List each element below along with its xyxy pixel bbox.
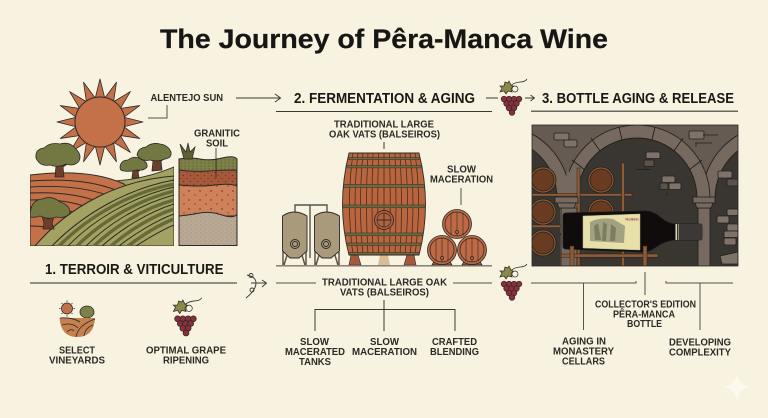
icon: sparkle watermark: [724, 374, 750, 400]
arrow: sun to fermentation: [236, 94, 280, 102]
icon: optimal grape ripening: [173, 298, 202, 336]
label: aging in monastery cellars: MONASTERY: [553, 346, 614, 358]
label: traditional large oak vats: OAK VATS (BALSEIROS): [329, 129, 440, 141]
label: select vineyards: [49, 345, 105, 366]
label: crafted blending: BLENDING: [430, 346, 479, 358]
label: granitic soil: [194, 128, 240, 178]
label: traditional large oak vats lower: TRADITIONAL LARGE OAK: [322, 277, 447, 289]
heading: bottle aging and release: 3. BOTTLE AGING & RELEASE: [542, 91, 734, 107]
label: slow macerated tanks: [285, 336, 345, 368]
label: slow maceration: SLOW: [370, 336, 399, 348]
icon: grape connector lower: [500, 264, 527, 300]
label: developing complexity: COMPLEXITY: [669, 347, 731, 359]
label: traditional large oak vats lower: VATS (BALSEIROS): [340, 287, 429, 299]
label: collector's edition bottle: PÊRA-MANCA: [613, 308, 675, 320]
illustration: monastery cellar with bottle: [532, 124, 738, 266]
label: slow maceration (barrels): MACERATION: [430, 174, 493, 186]
arrow: vine flourish: [246, 274, 266, 298]
label: optimal grape ripening: OPTIMAL GRAPE: [146, 345, 226, 357]
label: optimal grape ripening: [146, 345, 226, 366]
illustration: granitic soil cross-section: [179, 143, 237, 246]
red ploughed hill: [30, 173, 131, 246]
illustration: Alentejo sun: [57, 79, 143, 165]
label: collector's edition bottle: [595, 299, 696, 330]
bottle section connector lines: [531, 281, 733, 330]
rack: [532, 163, 632, 266]
illustration: stacked small barrels: [428, 210, 486, 265]
illustration: trees on the ridge: [36, 143, 171, 178]
back hill: [116, 166, 174, 185]
olive vine rows: [35, 176, 174, 246]
heading: terroir and viticulture: 1. TERROIR & VITICULTURE: [45, 262, 224, 278]
heading: fermentation and aging: 2. FERMENTATION & AGING: [294, 91, 475, 107]
label: developing complexity: DEVELOPING: [669, 337, 731, 349]
label: select vineyards: VINEYARDS: [49, 354, 105, 366]
label: aging in monastery cellars: CELLARS: [562, 356, 605, 368]
label: traditional large oak vats lower: [322, 277, 447, 299]
label: aging in monastery cellars: AGING IN: [562, 336, 606, 348]
label: traditional large oak vats: TRADITIONAL LARGE: [334, 119, 434, 131]
label: collector's edition bottle: BOTTLE: [627, 318, 662, 330]
label: slow maceration (barrels): [430, 164, 493, 205]
front rack: [561, 246, 658, 266]
label: slow maceration (barrels): SLOW: [447, 164, 476, 176]
label: slow maceration: MACERATION: [352, 346, 417, 358]
bottle: Pêra-Manca: [625, 216, 639, 222]
tree connector lines: [315, 300, 455, 331]
line: branch from vats: [276, 282, 492, 284]
label: Alentejo sun: ALENTEJO SUN: [150, 92, 223, 104]
label: optimal grape ripening: RIPENING: [163, 354, 209, 366]
bricks: [554, 131, 738, 264]
arches: [532, 125, 738, 266]
label: crafted blending: CRAFTED: [432, 336, 477, 348]
label: aging in monastery cellars: [553, 336, 614, 368]
label: slow macerated tanks: SLOW: [300, 336, 329, 348]
label: collector's edition bottle: COLLECTOR'S EDITION: [595, 299, 696, 311]
illustration: steel tanks: [282, 205, 340, 265]
illustration: rolling vineyard landscape: [30, 167, 174, 246]
label: granitic soil: GRANITIC: [194, 128, 240, 140]
ground line: [276, 265, 492, 267]
icon: select vineyards: [59, 300, 95, 337]
bottle: [563, 211, 702, 252]
icon: grape connector top: [486, 79, 534, 115]
lower left tree: [30, 198, 70, 229]
label: traditional large oak vats: [329, 119, 440, 149]
label: crafted blending: [430, 336, 479, 358]
label: slow macerated tanks: TANKS: [299, 356, 331, 368]
label: slow macerated tanks: MACERATED: [285, 346, 345, 358]
barrels: [530, 167, 614, 256]
label: select vineyards: SELECT: [59, 345, 96, 357]
label: granitic soil: SOIL: [206, 138, 229, 150]
label: slow maceration: [352, 336, 417, 358]
illustration: large oak vat: [342, 152, 426, 266]
label: developing complexity: [669, 337, 731, 359]
label: Alentejo sun: [148, 92, 223, 118]
title: The Journey of Pêra-Manca Wine: [160, 24, 608, 54]
pier: [555, 197, 715, 266]
